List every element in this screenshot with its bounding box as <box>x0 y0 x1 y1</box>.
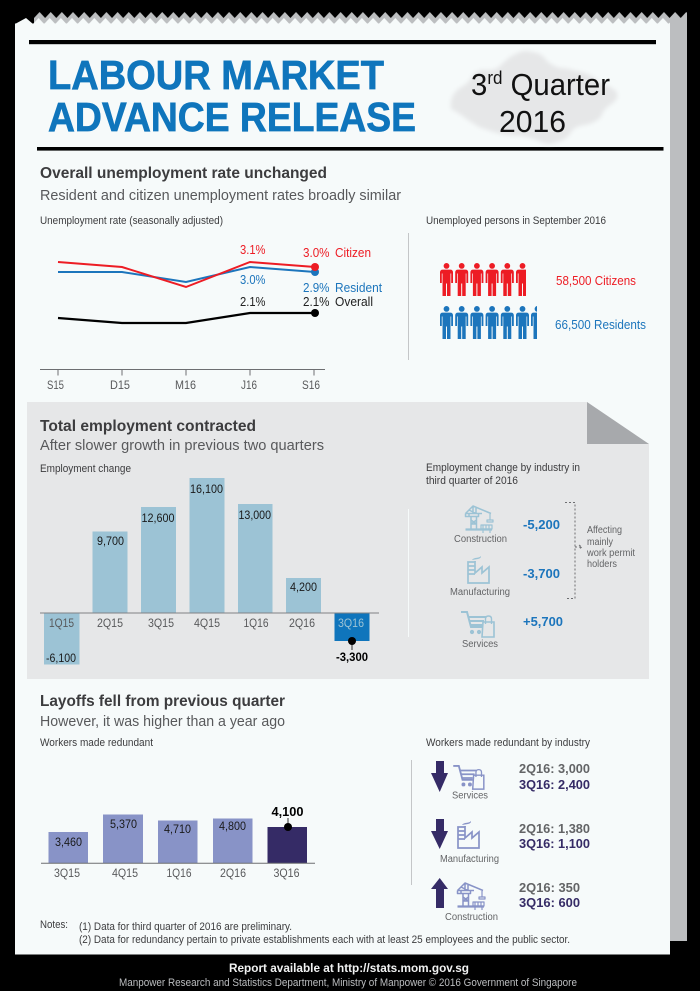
bar chart: employment change: 13,000 <box>238 508 271 522</box>
footer: Report available at http://stats.mom.gov.sg <box>229 961 469 975</box>
redundancy by industry list: 3Q16: 1,100 <box>519 837 590 851</box>
quarter badge with cloud: 3 <box>471 67 488 102</box>
chart title: employment by industry: third quarter of 2016 <box>426 475 518 487</box>
heading: layoffs: Layoffs fell from previous quarter <box>40 693 285 710</box>
line chart: unemployment rate <box>40 242 382 392</box>
bar chart: employment change: 3Q16 <box>338 616 364 630</box>
heading: unemployment: Overall unemployment rate unchanged <box>40 165 327 182</box>
employment by industry list: Services <box>462 639 498 650</box>
footer: Manpower Research and Statistics Department, Ministry of Manpower © 2016 Government of Singapore <box>119 977 577 989</box>
line chart: unemployment rate: 3.1% <box>240 242 266 257</box>
line chart: unemployment rate: 3.0% <box>303 245 330 260</box>
icon: manufacturing factory <box>458 821 479 848</box>
bar chart: employment change: 2Q16 <box>289 616 315 630</box>
title: LABOUR MARKET <box>48 52 384 98</box>
employment by industry list: Manufacturing <box>450 587 510 598</box>
line chart: unemployment rate: 2.9% <box>303 280 330 295</box>
notes: (1) Data for third quarter of 2016 are preliminary. <box>79 921 292 933</box>
bar chart: workers made redundant: 3Q16 <box>274 866 300 880</box>
employment by industry list <box>408 502 635 650</box>
bar chart: workers made redundant: 2Q16 <box>220 866 246 880</box>
redundancy by industry list: 3Q16: 600 <box>519 896 580 910</box>
bar chart: employment change: 1Q16 <box>244 616 269 630</box>
bar chart: workers made redundant: 1Q16 <box>166 866 192 880</box>
bar chart: employment change: 9,700 <box>97 534 124 548</box>
panel: employment <box>27 402 649 679</box>
line chart: unemployment rate: 3.0% <box>240 272 266 287</box>
redundancy by industry list <box>412 760 590 923</box>
chart title: unemployment rate: Unemployment rate (seasonally adjusted) <box>40 215 223 227</box>
bar chart: workers made redundant: 4,100 <box>272 804 304 819</box>
quarter badge with cloud: Quarter <box>502 67 610 102</box>
chart title: unemployed persons: Unemployed persons in September 2016 <box>426 215 606 227</box>
bar chart: employment change <box>40 478 379 665</box>
bar chart: employment change: 4,200 <box>290 580 317 594</box>
bar chart: workers made redundant: 4,800 <box>219 819 246 833</box>
bar chart: employment change: 1Q15 <box>49 616 74 630</box>
redundancy by industry list: 2Q16: 350 <box>519 881 580 895</box>
arrow: manufacturing down <box>431 819 448 849</box>
icon: factory <box>468 556 489 583</box>
redundancy by industry list: 2Q16: 1,380 <box>519 822 590 836</box>
employment by industry list: -5,200 <box>523 517 560 532</box>
icon: construction crane <box>458 883 485 910</box>
icon: shopping cart <box>461 612 494 637</box>
line chart: unemployment rate: M16 <box>175 378 196 392</box>
quarter badge with cloud <box>451 51 617 144</box>
employment by industry list: Affecting <box>587 525 622 536</box>
redundancy by industry list: Construction <box>445 912 498 923</box>
employment by industry list: mainly <box>587 537 613 548</box>
icon: services cart <box>453 766 484 789</box>
bar chart: employment change: 16,100 <box>190 482 223 496</box>
chart title: employment change: Employment change <box>40 463 131 475</box>
redundancy by industry list: 3Q16: 2,400 <box>519 778 590 792</box>
notes: Notes: <box>40 919 68 931</box>
bar chart: employment change: -6,100 <box>46 651 76 665</box>
line chart: unemployment rate: S16 <box>302 378 320 392</box>
bar chart: employment change: 4Q15 <box>194 616 220 630</box>
arrow: services down <box>431 761 448 792</box>
line chart: unemployment rate: Overall <box>335 294 373 309</box>
bar chart: workers made redundant <box>41 804 315 880</box>
title: ADVANCE RELEASE <box>48 94 416 140</box>
heading: employment: Total employment contracted <box>40 418 256 435</box>
line chart: unemployment rate: J16 <box>241 378 257 392</box>
employment by industry list: holders <box>587 559 617 570</box>
notes: (2) Data for redundancy pertain to private establishments each with at least 25 employees and the public sector. <box>79 934 570 946</box>
header rules <box>29 40 664 151</box>
bar chart: employment change: 3Q15 <box>148 616 174 630</box>
subheading: unemployment: Resident and citizen unemployment rates broadly similar <box>40 187 401 204</box>
line chart: unemployment rate: 2.1% <box>240 294 266 309</box>
employment by industry list: Construction <box>454 534 507 545</box>
quarter badge with cloud: 2016 <box>499 104 566 139</box>
bar chart: workers made redundant: 4Q15 <box>112 866 138 880</box>
subheading: employment: After slower growth in previous two quarters <box>40 437 324 454</box>
footer <box>119 961 577 989</box>
bar chart: employment change: -3,300 <box>336 650 368 664</box>
line chart: unemployment rate: Resident <box>335 280 382 295</box>
bar chart: workers made redundant: 3,460 <box>55 835 82 849</box>
employment by industry list: +5,700 <box>523 614 563 629</box>
subheading: layoffs: However, it was higher than a year ago <box>40 713 285 730</box>
redundancy by industry list: Manufacturing <box>440 854 499 865</box>
employment by industry list: work permit <box>586 548 635 559</box>
bar chart: employment change: 2Q15 <box>97 616 123 630</box>
title <box>48 52 416 140</box>
redundancy by industry list: 2Q16: 3,000 <box>519 762 590 776</box>
chart title: workers made redundant: Workers made redundant <box>40 737 153 749</box>
line chart: unemployment rate: S15 <box>47 378 64 392</box>
employment by industry list: -3,700 <box>523 566 560 581</box>
line chart: unemployment rate: Citizen <box>335 245 371 260</box>
line chart: unemployment rate: 2.1% <box>303 294 330 309</box>
pictogram: unemployed persons: 58,500 Citizens <box>556 273 636 288</box>
chart title: redundant by industry: Workers made redundant by industry <box>426 737 590 749</box>
line chart: unemployment rate: D15 <box>110 378 130 392</box>
notes <box>40 919 570 946</box>
chart title: employment by industry <box>426 462 580 487</box>
quarter badge with cloud: rd <box>487 68 502 88</box>
chart title: employment by industry: Employment change by industry in <box>426 462 580 474</box>
bar chart: workers made redundant: 4,710 <box>164 822 191 836</box>
pictogram: unemployed persons <box>408 233 646 360</box>
bar chart: workers made redundant: 5,370 <box>110 817 137 831</box>
arrow: construction up <box>431 878 448 908</box>
redundancy by industry list: Services <box>452 790 488 802</box>
bar chart: employment change: 12,600 <box>142 511 175 525</box>
bar chart: workers made redundant: 3Q15 <box>54 866 80 880</box>
icon: construction crane <box>466 506 493 533</box>
pictogram: unemployed persons: 66,500 Residents <box>555 317 646 332</box>
